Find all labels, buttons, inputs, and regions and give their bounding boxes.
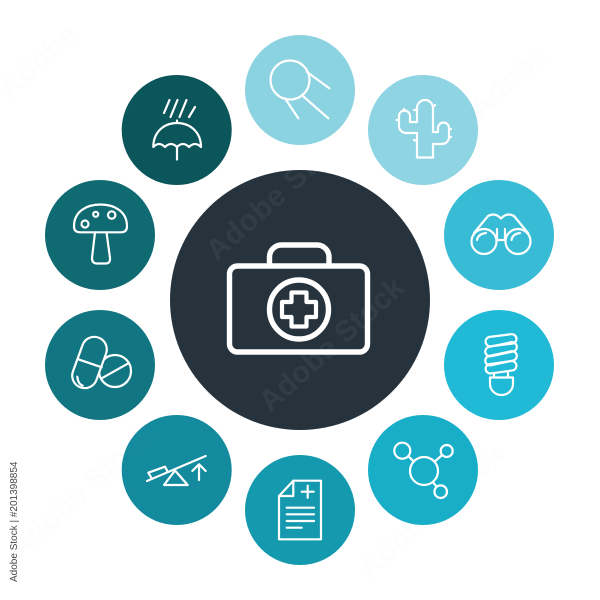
- icon: cactus: [396, 100, 451, 158]
- icon: pills: [69, 333, 131, 392]
- panel: binoculars circle: [444, 180, 554, 290]
- panel: cactus circle: [368, 75, 478, 185]
- icon: first aid briefcase: [230, 245, 368, 352]
- icon: binoculars: [472, 214, 530, 254]
- panel: central briefcase circle: Adobe Stock: [253, 271, 411, 418]
- icon: medical document: [279, 481, 321, 539]
- icon: mushroom: [74, 204, 127, 264]
- watermark text: Adobe Stock: [353, 438, 511, 585]
- panel: medical document circle: [245, 455, 355, 565]
- panel: central briefcase circle: [170, 152, 430, 430]
- icon: molecule: [394, 443, 453, 498]
- side credit text: Adobe Stock | #201398854: [9, 461, 20, 582]
- panel: central briefcase circle: Adobe St: [200, 152, 322, 267]
- panel: pills circle: [45, 310, 155, 420]
- panel: molecule circle: [368, 415, 478, 525]
- icon: umbrella in rain: [153, 100, 201, 160]
- panel: umbrella circle: [122, 75, 232, 185]
- watermark text: Adobe Stock: [3, 418, 161, 565]
- panel: seesaw circle: [122, 415, 232, 525]
- panel: light bulb circle: [444, 310, 554, 420]
- watermark text: Adobe: [463, 38, 554, 125]
- icon: spiral light bulb: [484, 334, 518, 395]
- icon: seesaw with arrow: [147, 456, 206, 485]
- panel: satellite circle: [245, 35, 355, 145]
- icon: satellite: [270, 60, 329, 118]
- panel: mushroom circle: [45, 180, 155, 290]
